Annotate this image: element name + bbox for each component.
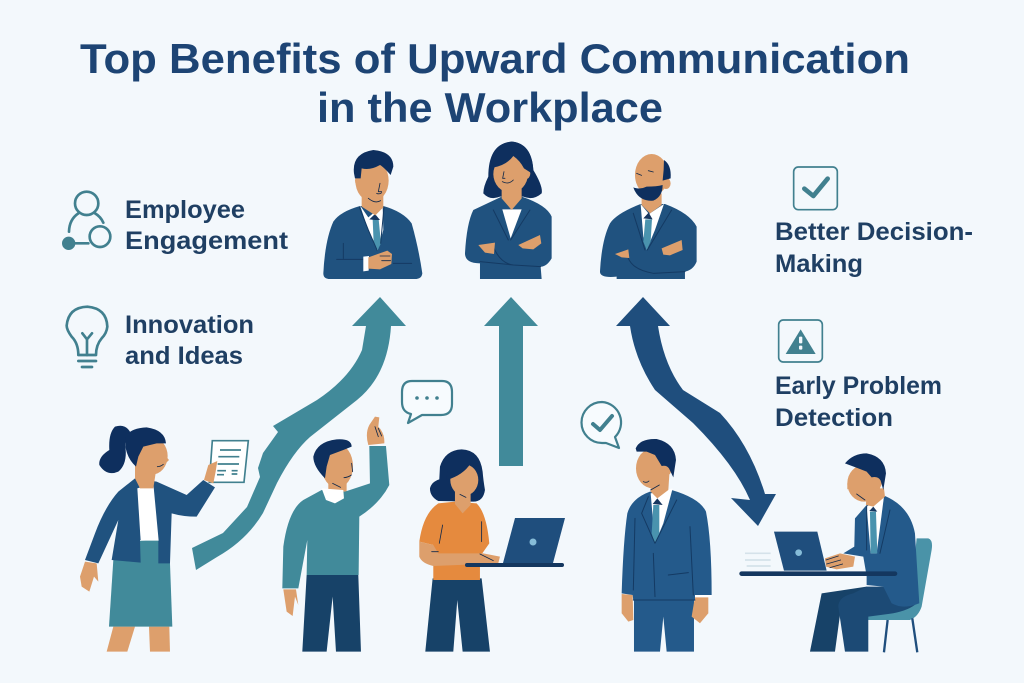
label: innovation and ideas: and Ideas (125, 342, 243, 370)
icon: check box (794, 167, 837, 210)
label: innovation and ideas: Innovation (125, 311, 254, 339)
label: employee engagement: Employee (125, 196, 245, 224)
label: employee engagement (125, 196, 289, 255)
label: early problem detection: Detection (775, 404, 893, 432)
document (209, 441, 248, 482)
benefit: innovation and ideas (67, 307, 254, 370)
label: early problem detection (775, 372, 942, 432)
title: in the Workplace (317, 84, 663, 131)
arrow: right curved dark blue (616, 297, 776, 526)
arrow: center straight teal (484, 297, 538, 466)
icon: light bulb (67, 307, 107, 367)
speech bubble: dots (402, 381, 452, 423)
benefit: early problem detection (775, 320, 942, 432)
person: man in suit standing (622, 439, 712, 652)
label: better decision-making: Making (775, 250, 863, 278)
title (80, 35, 910, 131)
person: woman with laptop (419, 449, 500, 652)
arrow: left curved teal (192, 297, 406, 570)
icon: warning triangle (779, 320, 822, 362)
label: employee engagement: Engagement (125, 227, 289, 255)
label: early problem detection: Early Problem (775, 372, 942, 400)
laptop and desk (742, 532, 895, 574)
person: man seated at desk (742, 453, 932, 652)
benefit: employee engagement (62, 192, 289, 255)
label: innovation and ideas (125, 311, 254, 370)
label: better decision-making: Better Decision- (775, 218, 973, 246)
laptop: center (467, 518, 565, 565)
person: woman with document (80, 426, 248, 652)
manager: woman with crossed arms (465, 142, 552, 279)
title: Top Benefits of Upward Communication (80, 35, 910, 82)
manager: man with hand on chest (323, 150, 422, 279)
person: man with raised hand (282, 417, 389, 652)
speech bubble: check (582, 402, 621, 448)
chair (865, 538, 932, 652)
manager: bald man with beard (600, 154, 697, 279)
label: better decision-making (775, 218, 973, 278)
benefit: better decision-making (775, 167, 973, 278)
icon: people network (62, 192, 110, 250)
